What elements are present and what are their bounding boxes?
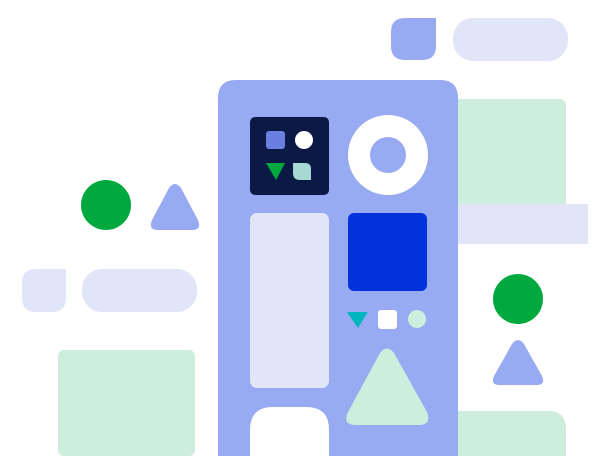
top right pill: [453, 18, 568, 61]
dark app tile: [250, 117, 329, 195]
green triangle: [346, 348, 428, 425]
right green panel: [440, 99, 566, 209]
light tall card: [250, 213, 329, 388]
blue square: [348, 213, 427, 291]
right green circle: [493, 274, 543, 324]
bottom white button: [250, 407, 329, 456]
left lavender tab: [22, 269, 66, 312]
left blue triangle: [151, 184, 199, 230]
left pill: [82, 269, 197, 312]
right blue triangle: [493, 340, 543, 385]
top right blue tab: [391, 18, 436, 60]
bottom right green panel: [440, 411, 566, 456]
right lavender band: [440, 204, 588, 244]
ring icon: [359, 126, 417, 184]
phone body: [218, 80, 458, 456]
left green panel: [58, 350, 195, 456]
left green circle: [81, 180, 131, 230]
small icons row: [348, 310, 426, 329]
